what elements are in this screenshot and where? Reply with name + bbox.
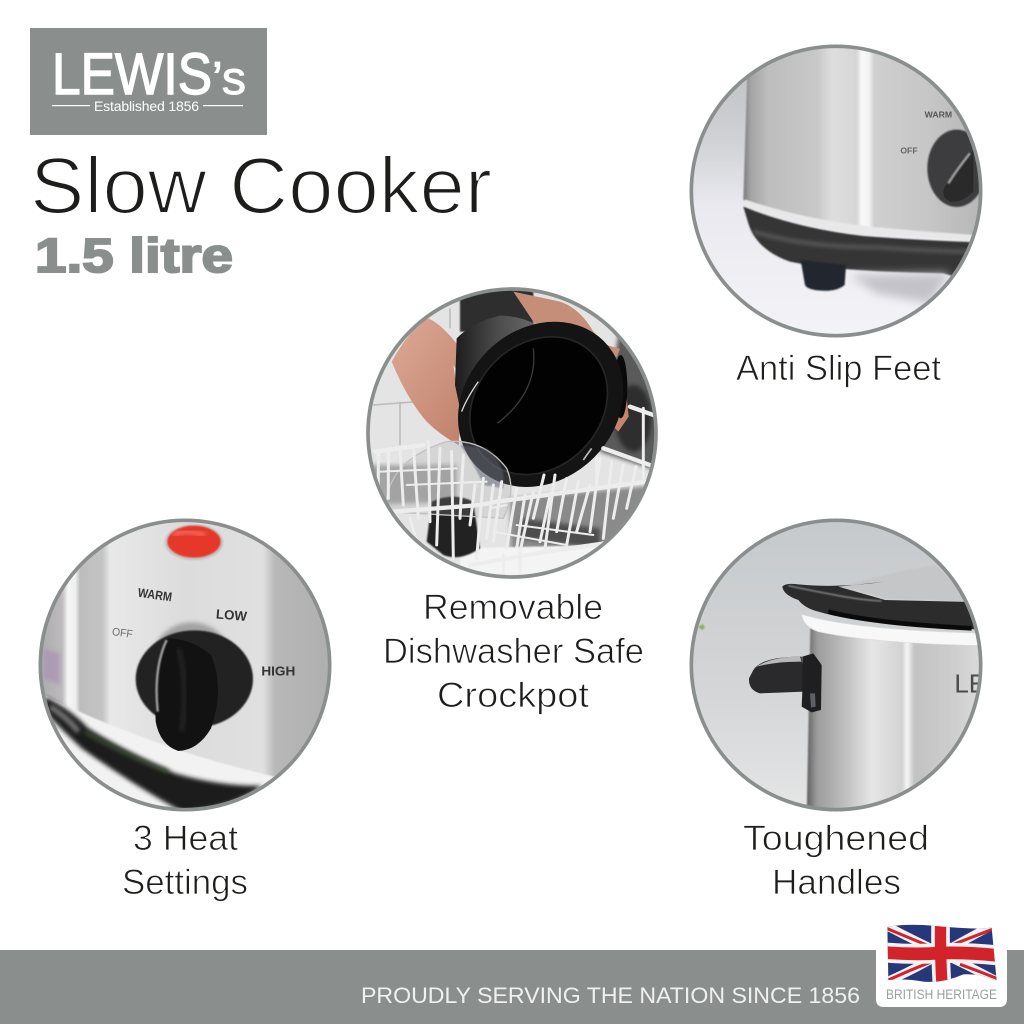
base curve	[46, 695, 274, 807]
rubber foot	[801, 260, 846, 291]
side handle	[749, 653, 822, 712]
icon: union jack flag	[887, 924, 997, 982]
panel: heat settings dial photo: LOW	[215, 606, 248, 624]
footer bar	[0, 950, 1024, 1024]
lower crock on rack	[427, 497, 480, 557]
glass lid top	[847, 572, 963, 600]
dial labels: WARM	[137, 586, 173, 604]
subtitle: 1.5 litre: 1.5 litre	[35, 230, 233, 283]
indicator light	[165, 524, 223, 560]
logo: Lewis's Established 1856: ’s	[212, 52, 246, 104]
logo: Lewis's Established 1856: LEWIS	[52, 42, 212, 107]
footer slogan: PROUDLY SERVING THE NATION SINCE 1856	[361, 983, 860, 1008]
label: Removable Dishwasher Safe Crockpot: Removable	[423, 588, 603, 627]
glass lid	[387, 441, 511, 518]
steel body	[806, 628, 966, 808]
white rim	[802, 614, 985, 646]
label: 3 Heat Settings: 3 Heat	[133, 819, 238, 858]
badge: British Heritage	[876, 922, 1007, 1007]
crockpot lip	[782, 582, 985, 630]
knob	[136, 622, 253, 751]
steel body	[742, 48, 979, 236]
badge: British Heritage: BRITISH HERITAGE	[886, 987, 997, 1002]
panel: heat settings dial photo: OFF	[111, 626, 134, 641]
hands	[392, 292, 629, 445]
label: Removable Dishwasher Safe Crockpot	[383, 588, 644, 715]
label: Removable Dishwasher Safe Crockpot: Dishwasher Safe	[383, 632, 644, 671]
label: Toughened Handles	[743, 819, 929, 902]
panel: anti slip feet photo: OFF	[900, 145, 918, 155]
label: Anti Slip Feet: Anti Slip Feet	[736, 349, 941, 388]
label: Removable Dishwasher Safe Crockpot: Crockpot	[437, 676, 589, 715]
label: Toughened Handles: Handles	[772, 863, 901, 902]
label: 3 Heat Settings: Settings	[122, 863, 248, 902]
logo: Lewis's Established 1856	[30, 28, 267, 135]
knob	[927, 130, 986, 207]
panel: dishwasher safe crockpot photo	[360, 285, 660, 585]
panel: heat settings dial photo	[35, 515, 335, 815]
crockpot rim and inside	[458, 322, 628, 487]
title: Slow Cooker: Slow Cooker	[30, 141, 492, 230]
label: Toughened Handles: Toughened	[743, 819, 929, 858]
dark base	[742, 206, 970, 276]
label: 3 Heat Settings	[122, 819, 248, 902]
dish rack	[375, 407, 653, 575]
logo: Lewis's Established 1856: Established 1856	[94, 98, 199, 114]
panel: heat settings dial photo: HIGH	[261, 663, 295, 678]
crockpot outer wall	[455, 316, 537, 412]
brand letters on body: LE	[954, 668, 986, 698]
dial labels: WARM	[925, 109, 952, 119]
panel: toughened handles photo	[685, 515, 986, 815]
panel: anti slip feet photo	[690, 40, 990, 340]
